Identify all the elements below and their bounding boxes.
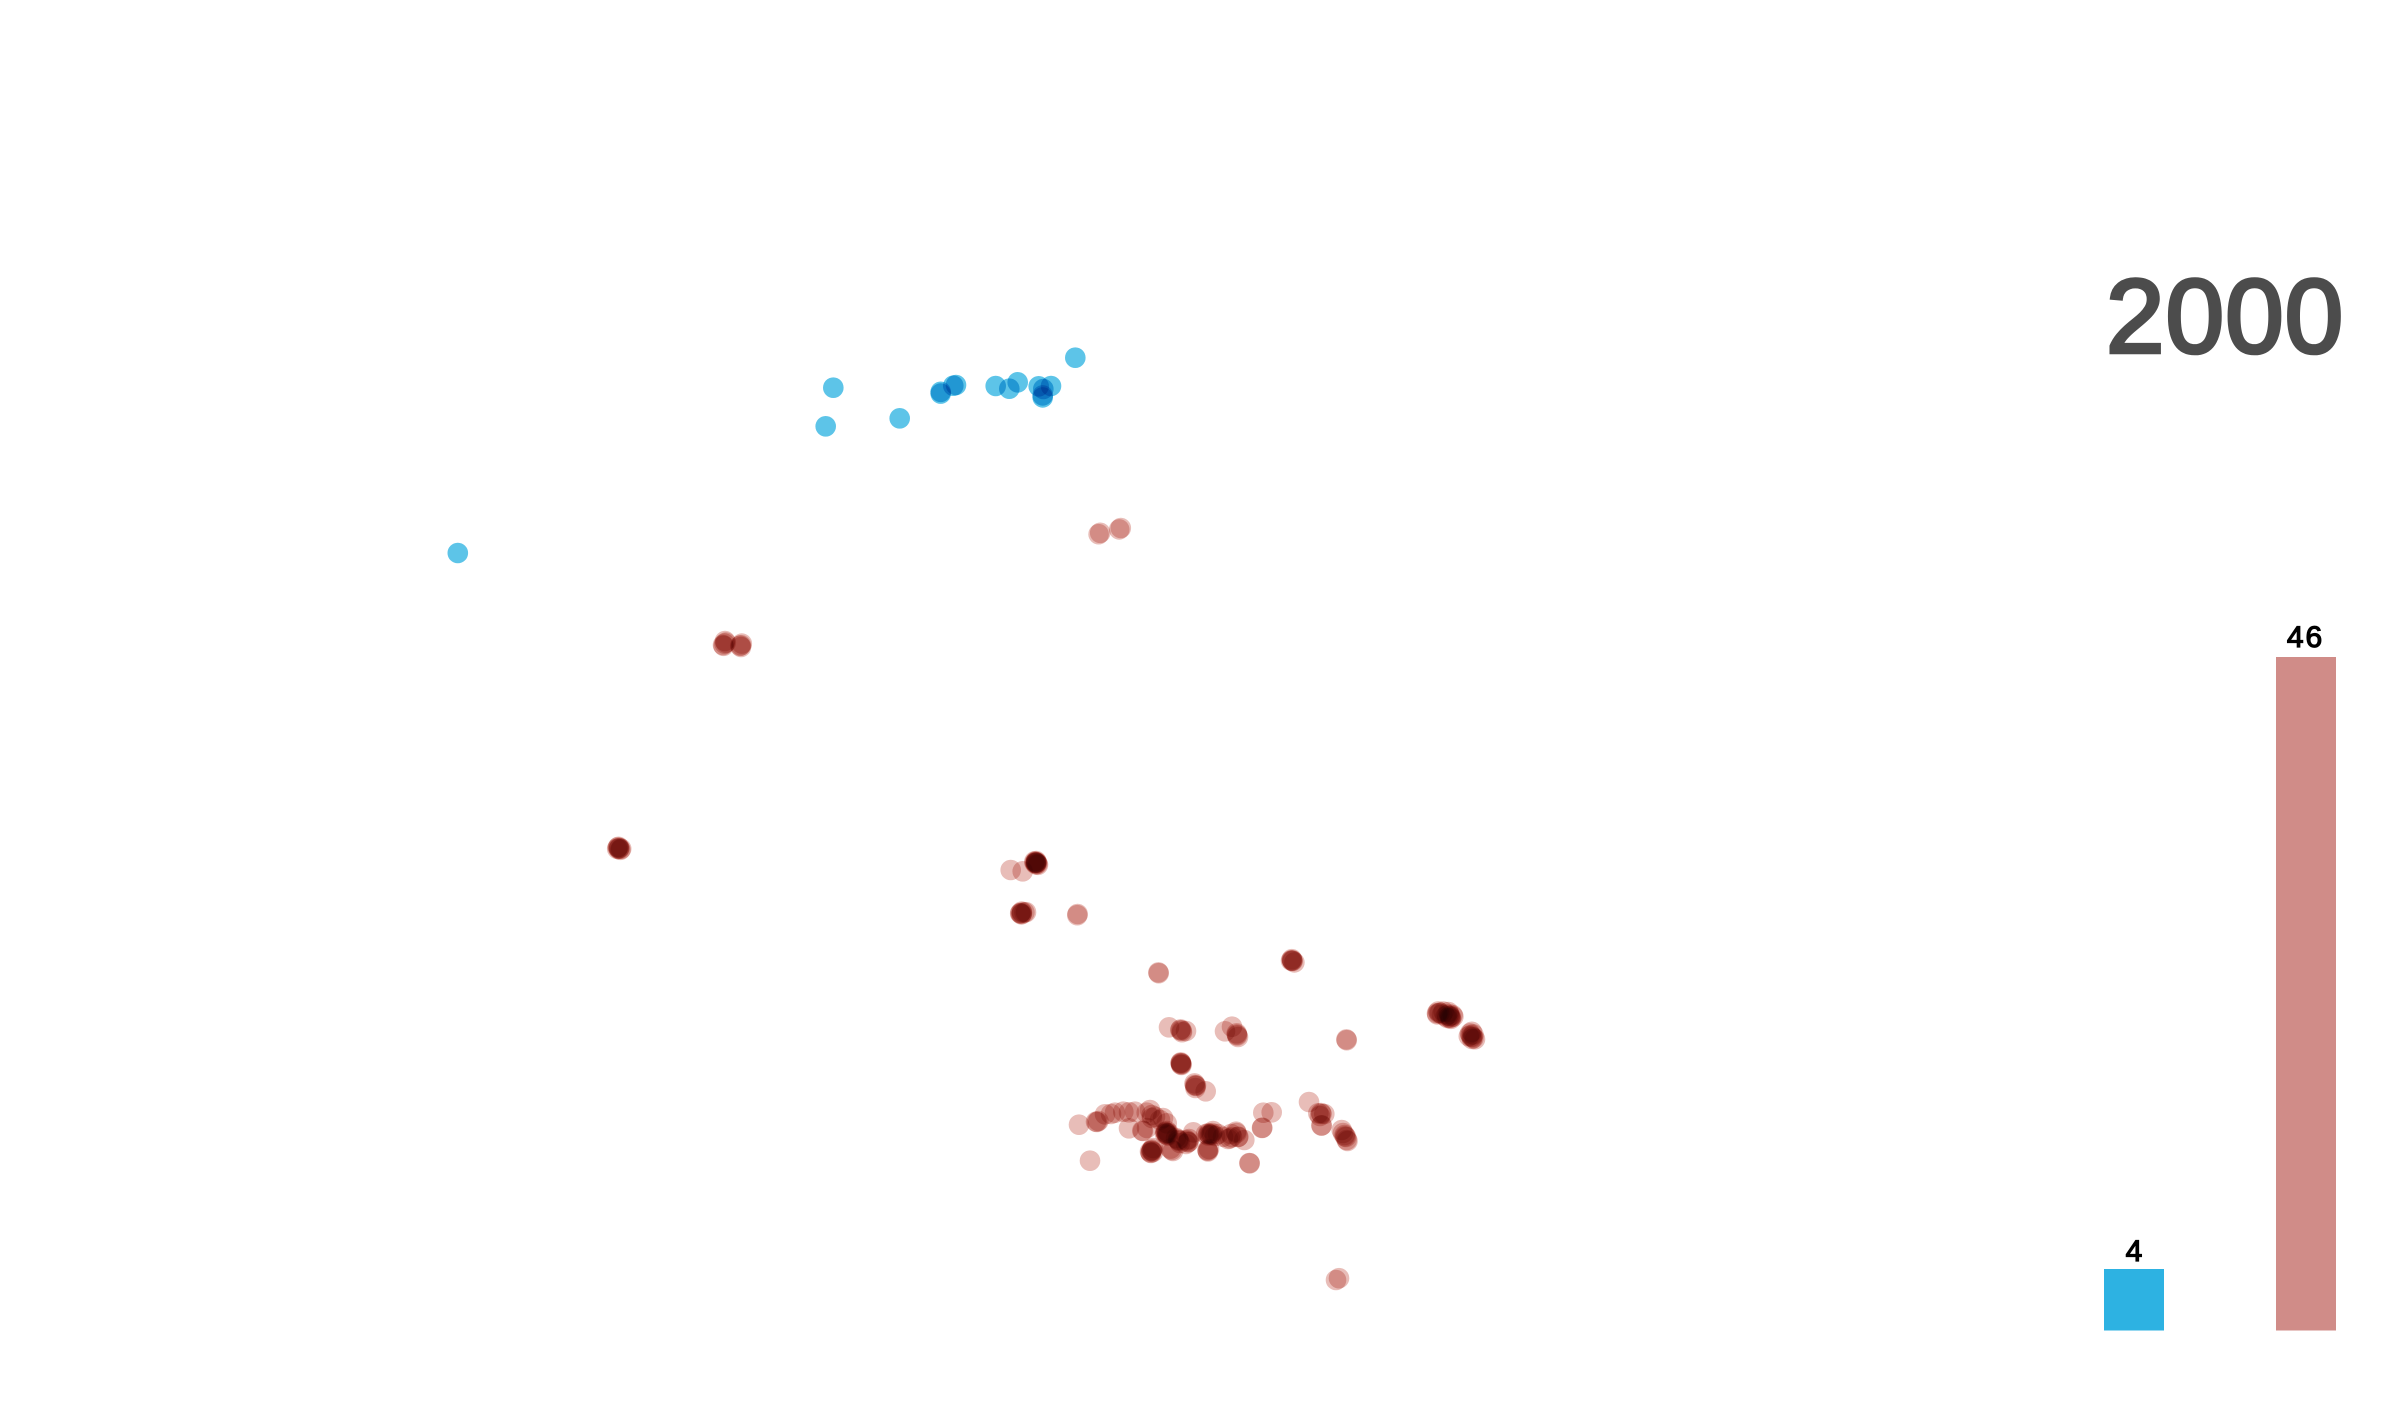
- cluster: western pair: [713, 631, 752, 657]
- scatter: blue points: [448, 347, 1086, 563]
- cluster: west africa point: [607, 836, 632, 860]
- cluster: eastern points: [1336, 1001, 1485, 1050]
- bar: red count: [2276, 657, 2336, 1330]
- bar label: 4: 4: [2126, 1235, 2142, 1268]
- scatter: red points: [607, 518, 1485, 1290]
- cluster: northern pair: [1088, 518, 1131, 544]
- cluster: far south pair: [1326, 1268, 1349, 1290]
- bar: blue count: [2104, 1269, 2164, 1330]
- year title: 2000: [2106, 258, 2344, 376]
- bar label: 46: 46: [2287, 621, 2324, 654]
- cluster: central points: [1000, 851, 1305, 1075]
- cluster: southern band: [1069, 1073, 1358, 1174]
